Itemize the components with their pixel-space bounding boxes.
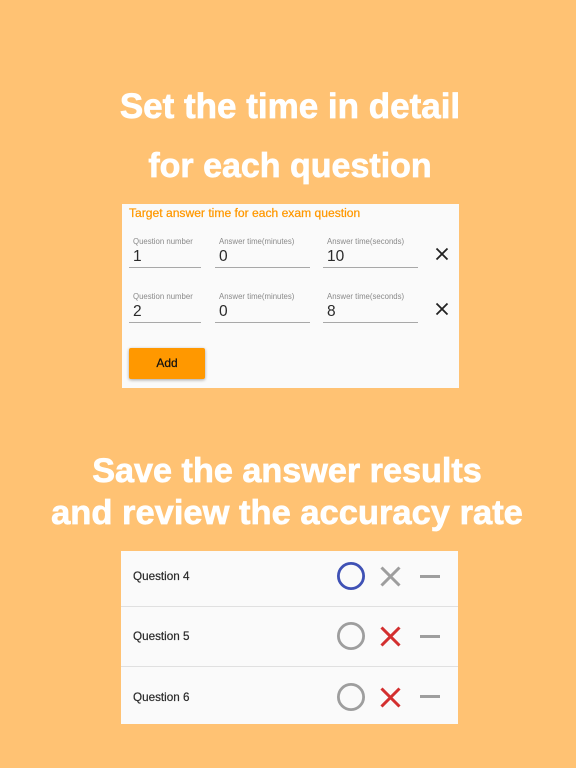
row 2: question number field: Question number xyxy=(133,292,193,301)
row 1: question number field xyxy=(129,237,201,268)
heading: set the time: Set the time in detail xyxy=(120,87,460,126)
row 1: seconds field: Answer time(seconds) xyxy=(327,237,404,246)
icon: row 2 delete xyxy=(436,302,448,316)
row 2: seconds field: Answer time(seconds) xyxy=(327,292,404,301)
icon: gray circle xyxy=(337,622,365,650)
panel: target answer time form xyxy=(122,204,459,388)
row 2: question number field: 2 xyxy=(133,303,142,320)
add button xyxy=(129,348,205,379)
row 2: minutes field: 0 xyxy=(219,303,228,320)
heading: review accuracy rate: and review the accuracy rate xyxy=(51,494,523,532)
row 2: seconds field: 8 xyxy=(327,303,336,320)
row: question 5 xyxy=(121,607,458,667)
row 1: minutes field: Answer time(minutes) xyxy=(219,237,294,246)
icon: red cross xyxy=(380,688,400,708)
row 1: seconds field xyxy=(323,237,418,268)
add button: Add xyxy=(156,356,178,370)
icon: selected circle xyxy=(337,562,365,590)
row 2: minutes field: Answer time(minutes) xyxy=(219,292,294,301)
heading: save the answer results: Save the answer results xyxy=(92,452,482,490)
icon: gray dash xyxy=(420,635,440,638)
icon: row 1 delete xyxy=(436,248,448,260)
icon: gray circle xyxy=(337,683,365,711)
row 1: minutes field: 0 xyxy=(219,248,228,265)
row 2: seconds field xyxy=(323,292,418,323)
panel: answer results list xyxy=(121,551,458,724)
icon: red cross xyxy=(380,626,400,646)
label: question 4: Question 4 xyxy=(133,570,190,583)
icon: gray dash xyxy=(420,575,440,578)
icon: gray cross xyxy=(380,566,400,586)
heading: for each question: for each question xyxy=(148,147,432,185)
row: question 4 xyxy=(121,551,458,607)
row 1: question number field: 1 xyxy=(133,248,142,265)
row 2: minutes field xyxy=(215,292,310,323)
form title: Target answer time for each exam question xyxy=(129,206,360,220)
label: question 6: Question 6 xyxy=(133,691,190,704)
label: question 5: Question 5 xyxy=(133,630,190,643)
row 1: question number field: Question number xyxy=(133,237,193,246)
row 1: seconds field: 10 xyxy=(327,248,344,265)
row: question 6 xyxy=(133,683,440,711)
row 1: minutes field xyxy=(215,237,310,268)
icon: gray dash xyxy=(420,695,440,698)
row 2: question number field xyxy=(129,292,201,323)
